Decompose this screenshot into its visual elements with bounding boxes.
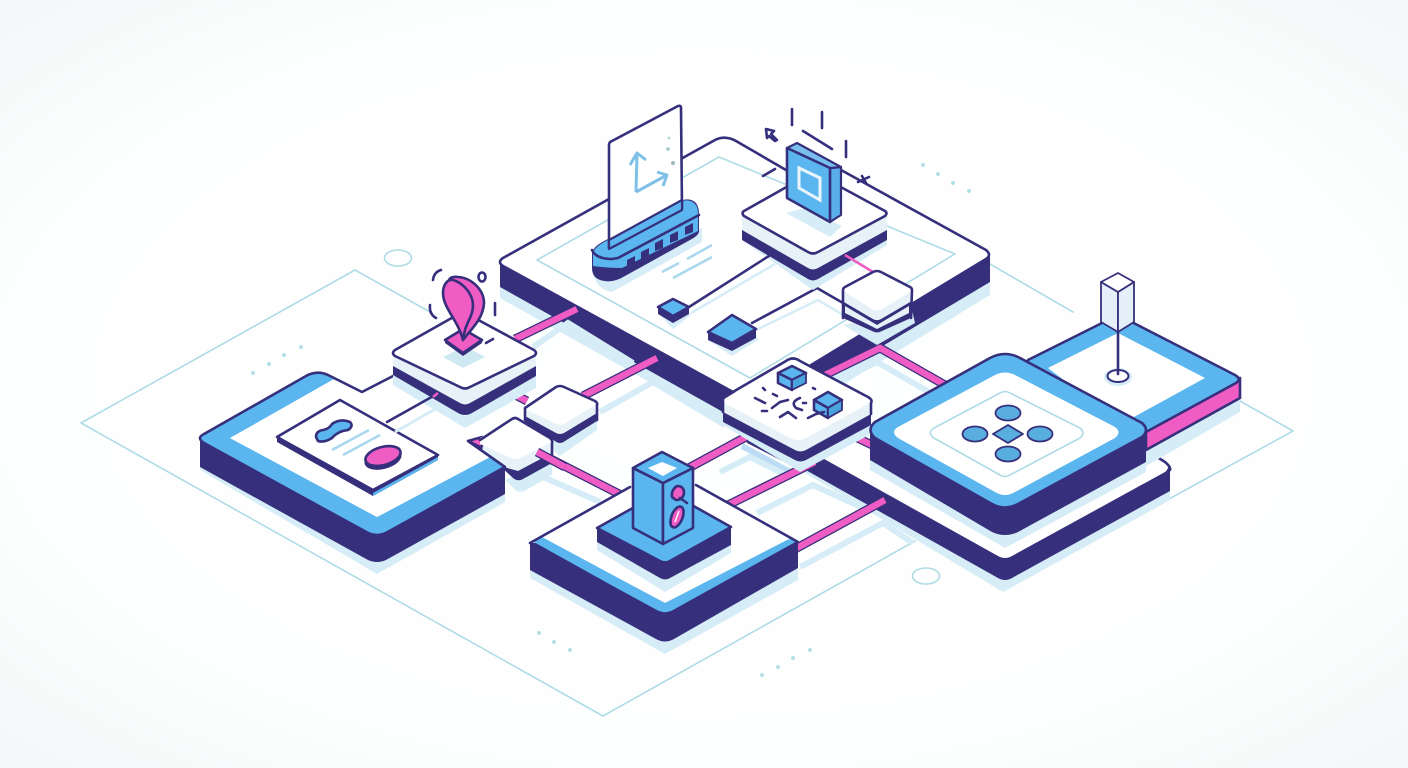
flag pole base [1104, 368, 1132, 386]
arrow sheet [609, 106, 682, 249]
base sheet: left outline [81, 270, 915, 716]
tower [633, 452, 693, 544]
cube 1 [778, 366, 806, 390]
left platform outline [200, 373, 505, 535]
status lines [662, 245, 712, 278]
pin shadow [443, 346, 485, 368]
base sheet: right outline [983, 260, 1293, 590]
white block platform [742, 172, 887, 290]
platform body [500, 253, 990, 428]
platform shadow [500, 270, 990, 440]
small blue node [658, 299, 692, 329]
flag platform inner [1048, 333, 1205, 417]
platform top face [500, 138, 989, 400]
hub inner white [894, 372, 1118, 495]
dots: bottom left [537, 631, 572, 652]
pin node side pale [393, 353, 536, 404]
hub inner outline [930, 392, 1083, 476]
connector shadow: small node [691, 264, 775, 313]
text lines [332, 430, 380, 455]
circuit marks [755, 388, 824, 418]
hub shadow [870, 450, 1146, 548]
panel: blue platform left [200, 373, 505, 574]
dots: left [251, 345, 303, 375]
hub icons [962, 406, 1052, 462]
pin body front [443, 280, 473, 340]
lower platform shadow [800, 455, 1170, 592]
pin base [445, 340, 482, 356]
pink side [1146, 378, 1240, 450]
bottom platform blue band [532, 535, 796, 615]
ring: lower right [912, 568, 940, 584]
ports [627, 223, 693, 268]
panel: middle circuit node [723, 358, 872, 472]
left card connector [387, 394, 437, 422]
panel: pin node [387, 270, 536, 432]
blue blob [316, 420, 352, 442]
connector: large node [752, 288, 843, 323]
thin pink link [845, 255, 873, 272]
left platform shadow [200, 455, 505, 574]
panel: flag platform [1020, 273, 1240, 466]
hub top [870, 354, 1146, 508]
node: small white hexagon B [468, 418, 552, 492]
pin node side dark [393, 353, 536, 415]
dots: top right [921, 163, 971, 193]
pin body back [449, 277, 484, 340]
ring: upper left [384, 250, 412, 266]
cursor icon [766, 129, 777, 141]
large node connector shadow [756, 300, 845, 330]
tower pedestal [597, 540, 731, 592]
panel: top platform [500, 138, 990, 440]
axis arrows [630, 153, 667, 192]
thin strut [742, 446, 790, 472]
bottom platform shadow [530, 565, 798, 654]
pin node top [393, 314, 536, 388]
data card [277, 400, 438, 496]
panel: lower white platform [742, 420, 1170, 592]
panel: central hub platform [870, 354, 1146, 548]
lower platform top [817, 420, 1168, 558]
bottom platform top [536, 480, 790, 603]
large blue node [708, 315, 758, 356]
left platform white face [230, 377, 490, 517]
pin node shadow [393, 374, 536, 428]
connector: small node [689, 254, 772, 307]
left platform top blue band [200, 373, 505, 534]
pale shadow bands [520, 323, 929, 567]
pink connectors [502, 309, 945, 549]
pin sparks [430, 270, 495, 343]
lower platform body [795, 444, 1170, 580]
flag platform blue frame [1020, 315, 1239, 432]
block sparks [763, 109, 869, 183]
pink stub over node B [537, 452, 565, 467]
left platform side [200, 438, 505, 562]
arrow sheet base [592, 199, 702, 292]
inner outline [537, 157, 955, 378]
panel: bottom platform [530, 452, 798, 654]
blue square block [787, 143, 841, 222]
node: small white hexagon A [525, 386, 597, 456]
white cube node [843, 271, 915, 345]
panel: contents of top platform [592, 106, 915, 356]
pink pill [362, 444, 404, 474]
cube 2 [814, 392, 842, 418]
flag box [1101, 273, 1134, 332]
dots: bottom right [760, 648, 812, 677]
hub side [870, 430, 1146, 535]
bottom platform side [530, 542, 798, 642]
